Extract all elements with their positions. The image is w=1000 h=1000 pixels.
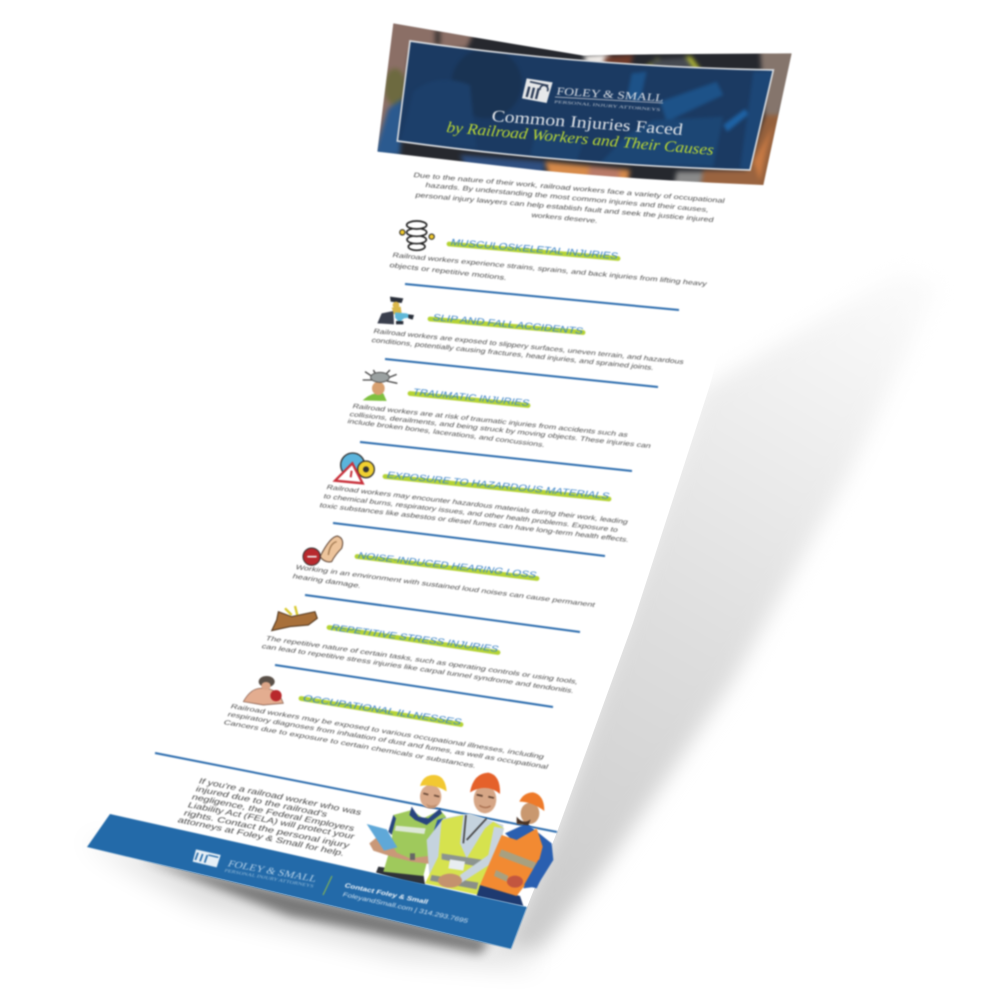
firm name: FOLEY & SMALL <box>555 86 665 104</box>
heading highlight <box>449 244 618 258</box>
body text <box>346 402 652 450</box>
heading: REPETITIVE STRESS INJURIES <box>329 622 501 654</box>
icon: ear and noise <box>303 536 343 565</box>
navy title panel <box>397 41 773 170</box>
icon: slipping worker <box>377 297 414 324</box>
body text <box>370 328 685 372</box>
heading highlight <box>410 394 528 406</box>
text: Working in an environment with sustained loud noises can cause permanent <box>294 564 597 609</box>
heading: SLIP AND FALL ACCIDENTS <box>431 312 585 336</box>
heading: NOISE-INDUCED HEARING LOSS <box>356 550 538 580</box>
body text <box>388 252 708 288</box>
text: can lead to repetitive stress injuries like carpal tunnel syndrome and tendonitis. <box>260 643 575 695</box>
call to action paragraph: rights. Contact the personal injury <box>182 809 351 850</box>
section: slip and fall accidents <box>370 297 685 372</box>
call to action paragraph <box>176 777 363 858</box>
paper cast shadow <box>80 273 938 966</box>
body text: objects or repetitive motions. <box>388 261 508 282</box>
heading highlight <box>329 628 498 652</box>
call to action paragraph: negligence, the Federal Employers <box>190 793 356 833</box>
firm tagline: PERSONAL INJURY ATTORNEYS <box>554 99 662 112</box>
worker with orange helmet <box>425 773 504 895</box>
text: to chemical burns, respiratory issues, and other health problems. Exposure to <box>322 493 619 534</box>
icon: injured head <box>363 370 397 401</box>
icon: firm logo column mark <box>522 78 553 103</box>
photo: three workers in hard hats and vests <box>367 773 553 906</box>
heading: MUSCULOSKELETAL INJURIES <box>449 237 620 261</box>
call to action paragraph: If you're a railroad worker who was <box>197 777 363 817</box>
heading highlight <box>301 698 461 724</box>
body text <box>318 484 630 544</box>
body text: hearing damage. <box>291 574 363 590</box>
title line one: Common Injuries Faced <box>490 107 684 139</box>
text: Railroad workers may be exposed to various occupational illnesses, including <box>229 703 545 761</box>
icon: hazard signs <box>335 453 374 483</box>
heading: EXPOSURE TO HAZARDOUS MATERIALS <box>385 470 611 501</box>
heading highlight <box>357 556 537 578</box>
body text: Cancers due to exposure to certain chemicals or substances. <box>222 718 478 769</box>
body text: Railroad workers are at risk of traumatic injuries from accidents such as <box>351 402 629 438</box>
paper sheet <box>87 23 791 949</box>
worker with clipboard <box>367 775 447 885</box>
heading: TRAUMATIC INJURIES <box>411 388 531 409</box>
body text <box>260 635 579 695</box>
text: The repetitive nature of certain tasks, such as operating controls or using tools, <box>264 635 579 686</box>
section: occupational illnesses <box>222 676 550 770</box>
icon: sick worker <box>243 676 283 705</box>
footer contact heading: Contact Foley & Small <box>343 882 430 906</box>
section: noise-induced hearing loss <box>291 536 597 609</box>
call to action paragraph: attorneys at Foley & Small for help. <box>176 816 346 858</box>
header banner <box>376 22 792 186</box>
worker with orange vest <box>477 792 553 906</box>
body text: include broken bones, lacerations, and concussions. <box>346 418 546 449</box>
text: respiratory diagnoses from inhalation of dust and fumes, as well as occupational <box>226 711 550 770</box>
section: musculoskeletal injuries <box>388 221 708 288</box>
footer firm name: FOLEY & SMALL <box>226 859 319 885</box>
heading: OCCUPATIONAL ILLNESSES <box>301 693 464 727</box>
body text <box>291 564 597 609</box>
icon: strained hand <box>272 606 317 631</box>
section: repetitive stress injuries <box>260 606 579 695</box>
icon: spine <box>400 221 434 250</box>
text: conditions, potentially causing fractures, head injuries, and sprained joints. <box>370 337 655 372</box>
call to action paragraph: injured due to the railroad's <box>194 785 329 819</box>
call to action paragraph: Liability Act (FELA) will protect your <box>186 801 356 841</box>
heading highlight <box>385 476 609 499</box>
section: exposure to hazardous materials <box>318 453 630 544</box>
footer band <box>87 814 527 949</box>
icon: footer logo mark <box>193 849 221 867</box>
footer tagline: PERSONAL INJURY ATTORNEYS <box>224 868 316 889</box>
section: traumatic injuries <box>346 370 652 450</box>
header photo background <box>376 22 792 186</box>
heading highlight <box>430 319 583 332</box>
body text <box>222 703 550 770</box>
footer contact details: FoleyandSmall.com | 314.293.7695 <box>341 891 470 925</box>
intro paragraph: workers deserve. <box>529 212 599 225</box>
intro paragraph <box>413 172 726 225</box>
